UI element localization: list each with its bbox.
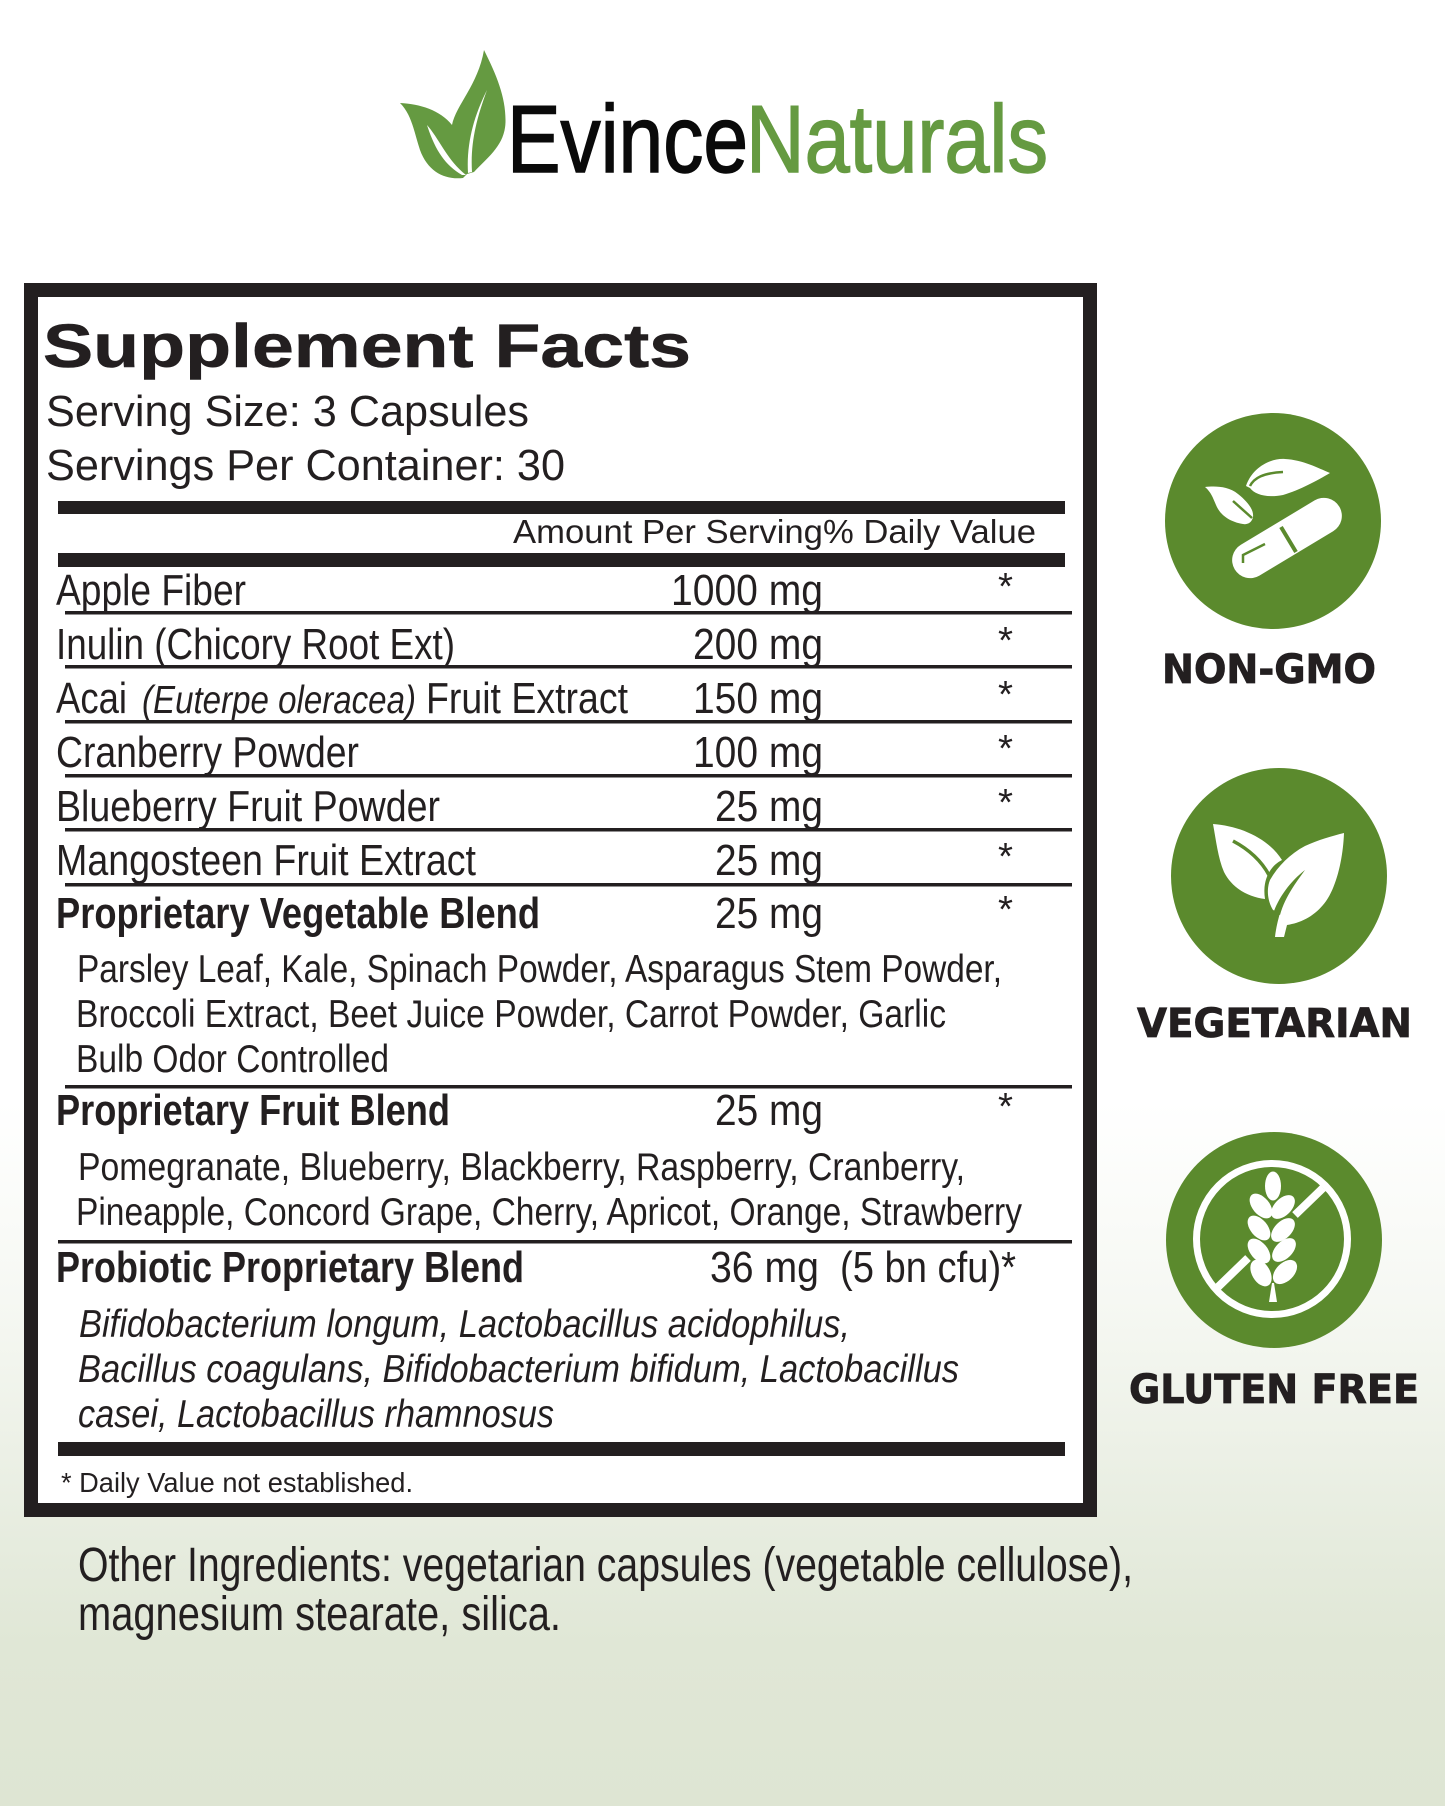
row: mangosteen bbox=[56, 836, 1013, 885]
panel: supplement facts bbox=[31, 290, 1090, 1510]
probiotic ingredients: Bacillus coagulans, Bifidobacterium bifidum, Lactobacillus bbox=[78, 1348, 959, 1391]
other ingredients text: magnesium stearate, silica. bbox=[78, 1588, 561, 1641]
badge: vegetarian bbox=[1137, 768, 1412, 1047]
footnote: * Daily Value not established. bbox=[61, 1467, 413, 1498]
row: probiotic proprietary blend: 36 mg bbox=[710, 1243, 819, 1292]
other ingredients text: Other Ingredients: vegetarian capsules (vegetable cellulose), bbox=[78, 1539, 1133, 1592]
icon: logo leaves bbox=[400, 50, 506, 178]
row: probiotic proprietary blend: (5 bn cfu)* bbox=[840, 1243, 1016, 1292]
fruit blend ingredients: Pineapple, Concord Grape, Cherry, Apricot, Orange, Strawberry bbox=[76, 1191, 1022, 1234]
badge: gluten free bbox=[1129, 1132, 1419, 1413]
logo wordmark: Evince bbox=[507, 86, 748, 193]
probiotic ingredients bbox=[78, 1303, 959, 1436]
logo: Evince Naturals bbox=[400, 50, 1048, 193]
fruit blend ingredients: Pomegranate, Blueberry, Blackberry, Raspberry, Cranberry, bbox=[78, 1146, 965, 1189]
vegetable blend ingredients: Parsley Leaf, Kale, Spinach Powder, Asparagus Stem Powder, bbox=[77, 948, 1002, 991]
label: vegetarian: VEGETARIAN bbox=[1137, 1001, 1412, 1047]
row: blueberry: 25 mg bbox=[715, 782, 823, 831]
row: acai bbox=[56, 674, 1013, 723]
row: cranberry: * bbox=[998, 728, 1013, 770]
row: acai: * bbox=[998, 674, 1013, 716]
label: gluten free: GLUTEN FREE bbox=[1129, 1367, 1419, 1413]
row: mangosteen: 25 mg bbox=[715, 836, 823, 885]
probiotic ingredients: casei, Lactobacillus rhamnosus bbox=[78, 1393, 554, 1436]
other ingredients text bbox=[78, 1539, 1133, 1641]
row: apple fiber: 1000 mg bbox=[671, 566, 823, 615]
row: proprietary vegetable blend: 25 mg bbox=[715, 889, 823, 938]
label: non-gmo: NON-GMO bbox=[1162, 647, 1376, 693]
row: cranberry: Cranberry Powder bbox=[56, 728, 359, 777]
row: proprietary fruit blend: * bbox=[998, 1086, 1013, 1128]
row: apple fiber bbox=[56, 566, 1013, 615]
icon: two leaves bbox=[1171, 768, 1387, 984]
column headers: Amount Per Serving% Daily Value bbox=[513, 513, 1036, 550]
servings per container: Servings Per Container: 30 bbox=[46, 441, 565, 490]
vegetable blend ingredients: Bulb Odor Controlled bbox=[76, 1038, 389, 1081]
row: mangosteen: Mangosteen Fruit Extract bbox=[56, 836, 476, 885]
row: acai: 150 mg bbox=[693, 674, 823, 723]
row: inulin: 200 mg bbox=[693, 620, 823, 669]
row: proprietary vegetable blend: Proprietary Vegetable Blend bbox=[56, 889, 540, 938]
row: proprietary fruit blend: Proprietary Fruit Blend bbox=[56, 1086, 450, 1135]
probiotic ingredients: Bifidobacterium longum, Lactobacillus acidophilus, bbox=[79, 1303, 850, 1346]
row: blueberry bbox=[56, 782, 1013, 831]
row: apple fiber: * bbox=[998, 566, 1013, 608]
serving size: Serving Size: 3 Capsules bbox=[46, 387, 529, 436]
vegetable blend ingredients bbox=[76, 948, 1002, 1081]
row: probiotic proprietary blend bbox=[56, 1243, 1016, 1292]
heading: supplement facts: Supplement Facts bbox=[43, 312, 691, 380]
row: mangosteen: * bbox=[998, 836, 1013, 878]
row: proprietary vegetable blend: * bbox=[998, 889, 1013, 931]
row: inulin: Inulin (Chicory Root Ext) bbox=[56, 620, 455, 669]
row: probiotic proprietary blend: Probiotic Proprietary Blend bbox=[56, 1243, 524, 1292]
badge: non-gmo bbox=[1162, 413, 1381, 693]
icon: leaves and capsule bbox=[1165, 413, 1381, 629]
row: acai: Acai bbox=[56, 674, 127, 723]
row: blueberry: * bbox=[998, 782, 1013, 824]
row: proprietary fruit blend: 25 mg bbox=[715, 1086, 823, 1135]
row: inulin bbox=[56, 620, 1013, 669]
logo wordmark green: Naturals bbox=[746, 86, 1048, 193]
row: apple fiber: Apple Fiber bbox=[56, 566, 246, 615]
row: proprietary fruit blend bbox=[56, 1086, 1013, 1135]
row: cranberry bbox=[56, 728, 1013, 777]
icon: crossed-out wheat bbox=[1166, 1132, 1382, 1348]
row: inulin: * bbox=[998, 620, 1013, 662]
vegetable blend ingredients: Broccoli Extract, Beet Juice Powder, Carrot Powder, Garlic bbox=[76, 993, 946, 1036]
row: acai: Fruit Extract bbox=[426, 674, 628, 723]
row: proprietary vegetable blend bbox=[56, 889, 1013, 938]
fruit blend ingredients bbox=[76, 1146, 1022, 1234]
row: acai: (Euterpe oleracea) bbox=[142, 679, 416, 722]
row: blueberry: Blueberry Fruit Powder bbox=[56, 782, 440, 831]
row: cranberry: 100 mg bbox=[693, 728, 823, 777]
